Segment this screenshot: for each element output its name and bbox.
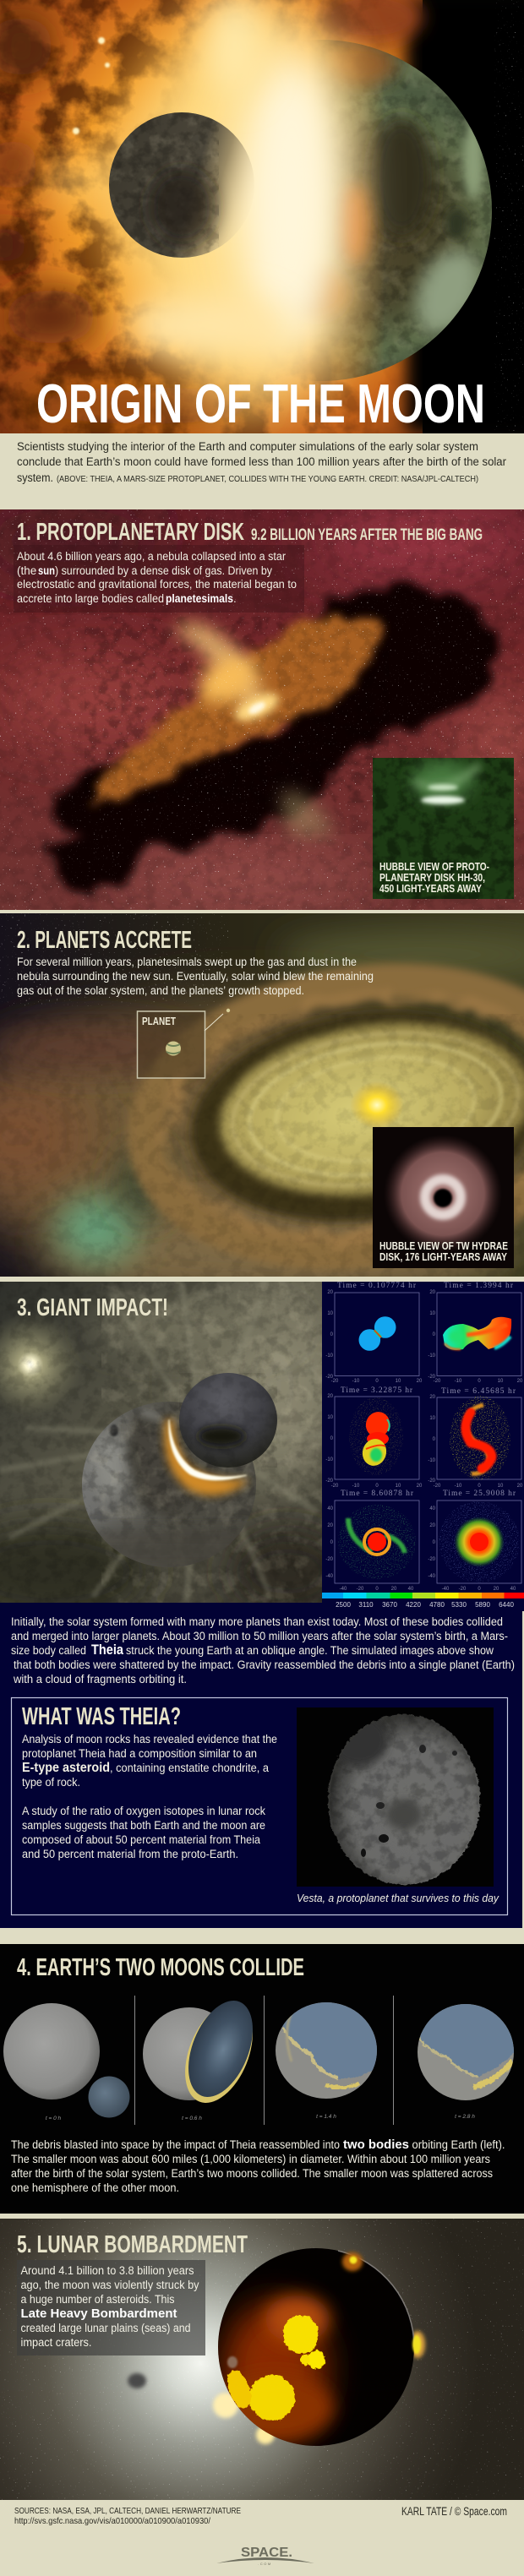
axis tick labels: 10	[498, 1484, 504, 1489]
text block: ) surrounded by a dense disk of gas. Driven by	[55, 564, 272, 577]
text block: one hemisphere of the other moon.	[11, 2181, 179, 2194]
axis tick labels: 20	[417, 1484, 423, 1489]
text block: planetesimals	[166, 592, 233, 605]
text block: A study of the ratio of oxygen isotopes in lunar rock	[22, 1805, 265, 1817]
axis tick labels: 10	[327, 1311, 334, 1316]
text block: E-type asteroid	[22, 1761, 110, 1775]
axis tick labels: -40	[442, 1587, 450, 1592]
axis tick labels: -40	[428, 1574, 436, 1579]
axis tick labels: -20	[428, 1557, 436, 1562]
axis tick labels: 20	[327, 1290, 334, 1295]
text block: Late Heavy Bombardment	[20, 2306, 177, 2321]
axis tick labels: -10	[325, 1353, 334, 1359]
axis tick labels: 10	[429, 1311, 436, 1316]
simulation titles: Time = 6.45685 hr	[441, 1387, 516, 1396]
planet: young Earth	[313, 40, 492, 381]
text block: Initially: Theia	[91, 1642, 124, 1658]
axis tick labels: 40	[408, 1587, 414, 1592]
text block: a huge number of asteroids. This	[20, 2293, 175, 2306]
footer: sources and credit	[14, 2505, 507, 2526]
axis tick labels: 40	[327, 1506, 334, 1511]
frame: t = 0.6 h: t = 0.6 h	[182, 2116, 202, 2121]
plot: t=0.11	[358, 1316, 396, 1351]
axis tick labels: 20	[327, 1523, 334, 1528]
frame: t = 0 h	[3, 2003, 130, 2121]
heading: 2. PLANETS ACCRETE	[17, 927, 192, 954]
text block: electrostatic and gravitational forces, the material began to	[17, 578, 297, 591]
simulation panel	[322, 1282, 524, 1609]
text block: nebula surrounding the new sun. Eventually, solar wind blew the remaining	[17, 970, 374, 983]
axis tick labels: -20	[428, 1375, 436, 1380]
logo: Space.com: .COM	[258, 2562, 272, 2566]
moon	[213, 2248, 425, 2446]
small body: Theia	[109, 112, 254, 258]
axis tick labels: 0	[433, 1540, 436, 1545]
asteroid	[128, 2373, 146, 2388]
axis tick labels: -40	[340, 1587, 347, 1592]
axis tick labels: 0	[478, 1379, 481, 1384]
color scale: 4220	[406, 1601, 421, 1609]
heading	[18, 522, 482, 541]
text block: two bodies	[343, 2138, 409, 2152]
axis tick labels: 10	[396, 1484, 401, 1489]
plot: t=1.4	[443, 1317, 511, 1350]
axis tick labels: -10	[325, 1457, 334, 1462]
inset: Hubble view of HH-30: PLANETARY DISK HH-30,	[379, 872, 485, 884]
axis tick labels: -20	[459, 1587, 467, 1592]
text block: type of rock.	[22, 1776, 80, 1789]
axis tick labels: 0	[330, 1540, 334, 1545]
text block: and 50 percent material from the proto-Earth.	[22, 1848, 238, 1860]
axis tick labels: -20	[434, 1484, 441, 1489]
text block: (the	[17, 564, 36, 577]
axis tick labels: -20	[434, 1379, 441, 1384]
callout: what was Theia	[12, 1698, 507, 1914]
axis tick labels: -20	[331, 1484, 339, 1489]
logo: Space.com	[216, 2546, 314, 2566]
axis tick labels: -20	[325, 1479, 334, 1484]
axis tick labels: 20	[429, 1395, 436, 1400]
inset: Hubble view of HH-30: 450 LIGHT-YEARS AWAY	[379, 883, 483, 895]
text block	[22, 1733, 277, 1860]
text block	[14, 545, 304, 613]
text block: Initially: with a cloud of fragments orbiting it.	[13, 1673, 187, 1686]
axis tick labels: 0	[375, 1587, 379, 1592]
spiral disk	[128, 954, 524, 1280]
heading: 3. GIANT IMPACT!	[17, 1294, 168, 1321]
axis tick labels: 20	[417, 1379, 423, 1384]
caption: Vesta, a protoplanet that survives to this day	[297, 1892, 499, 1904]
photo: Vesta	[297, 1707, 494, 1887]
axis tick labels: -10	[455, 1484, 462, 1489]
text block: Initially	[11, 1615, 515, 1686]
logo: Space.com: SPACE.	[241, 2546, 292, 2560]
panel: 4 two moons collide	[0, 1944, 524, 2214]
axis tick labels: -10	[352, 1484, 360, 1489]
panel: 5 lunar bombardment	[0, 2219, 524, 2500]
axis tick labels: -20	[325, 1375, 334, 1380]
axis tick labels: -20	[331, 1379, 339, 1384]
panel: 2 planets accrete	[0, 913, 524, 1293]
text block: .	[233, 592, 237, 605]
axis tick labels: 0	[433, 1437, 436, 1442]
frame: t = 0 h: t = 0 h	[46, 2116, 62, 2121]
color scale: 2500	[336, 1601, 351, 1609]
text block: , containing enstatite chondrite, a	[110, 1762, 269, 1774]
text block: ago, the moon was violently struck by	[20, 2279, 199, 2291]
axis tick labels: 0	[375, 1484, 379, 1489]
text block: protoplanet Theia had a composition similar to an	[22, 1747, 257, 1760]
frame: t = 2.8 h: t = 2.8 h	[455, 2114, 475, 2120]
axis tick labels: 20	[517, 1484, 523, 1489]
plot: t=8.6	[338, 1505, 416, 1579]
axis tick labels: 20	[429, 1290, 436, 1295]
intro text band	[0, 433, 524, 509]
text block: Initially: and merged into larger planets. About 30 million to 50 million years after the solar system’s birth, a Mars-	[11, 1630, 508, 1642]
simulation titles: Time = 0.107774 hr	[337, 1282, 417, 1290]
heading: 4. EARTH’S TWO MOONS COLLIDE	[17, 1954, 304, 1981]
footer: sources and credit: SOURCES: NASA, ESA, JPL, CALTECH, DANIEL HERWARTZ/NATURE	[14, 2506, 241, 2516]
intro text band: Scientists studying the interior of the Earth and computer simulations of the early solar system	[17, 440, 478, 453]
text block: created large lunar plains (seas) and	[20, 2322, 191, 2334]
text block: composed of about 50 percent material from Theia	[22, 1833, 260, 1846]
intro text band: system.	[17, 471, 53, 484]
inset: Hubble view of HH-30: HUBBLE VIEW OF PROTO-	[379, 861, 489, 873]
color scale: 5890	[475, 1601, 490, 1609]
text block: samples suggests that both Earth and the moon are	[22, 1819, 265, 1832]
panel: 1 protoplanetary disk	[0, 507, 524, 910]
heading: 5. LUNAR BOMBARDMENT	[17, 2231, 248, 2258]
axis tick labels: 10	[498, 1379, 504, 1384]
axis tick labels: 40	[510, 1587, 516, 1592]
impact illustration	[0, 1282, 347, 1622]
text block: after the birth of the solar system, Earth’s two moons collided. The smaller moon was splattered across	[11, 2167, 493, 2180]
small body: Theia	[179, 1373, 277, 1468]
heading: 1. PROTOPLANETARY DISK	[17, 519, 244, 546]
text block	[17, 2260, 205, 2355]
text block: The smaller moon was about 600 miles (1,000 kilometers) in diameter. Within about 100 million years	[11, 2153, 490, 2165]
text block: sun	[38, 564, 55, 577]
text block	[11, 2138, 505, 2194]
axis tick labels: 40	[429, 1506, 436, 1511]
axis tick labels: -40	[325, 1574, 334, 1579]
panel: 3 giant impact	[0, 1282, 524, 1928]
frame: t = 0.6 h	[143, 1991, 266, 2121]
axis tick labels: -20	[428, 1479, 436, 1484]
axis tick labels: 10	[429, 1416, 436, 1421]
text block: accrete into large bodies called	[17, 592, 164, 605]
color scale	[322, 1593, 524, 1609]
simulation titles: Time = 3.22875 hr	[341, 1386, 413, 1395]
text block: impact craters.	[20, 2336, 91, 2349]
simulation titles: Time = 8.60878 hr	[341, 1490, 414, 1498]
axis tick labels: 0	[375, 1379, 379, 1384]
axis tick labels: 0	[330, 1332, 334, 1337]
text block: About 4.6 billion years ago, a nebula collapsed into a star	[17, 550, 286, 563]
text block	[17, 956, 374, 997]
color scale: 3670	[382, 1601, 397, 1609]
plot: t=6.5	[450, 1396, 510, 1480]
axis tick labels: 0	[330, 1436, 334, 1441]
axis tick labels: 0	[478, 1587, 481, 1592]
axis tick labels: 10	[327, 1415, 334, 1420]
axis tick labels: -10	[428, 1353, 436, 1359]
callout: planet close-up	[137, 1009, 230, 1078]
inset: Hubble view of TW Hydrae	[373, 1127, 514, 1268]
plot: t=25.9	[439, 1501, 520, 1582]
axis tick labels: 20	[494, 1587, 499, 1592]
axis tick labels: 20	[517, 1379, 523, 1384]
simulation titles: Time = 25.9008 hr	[443, 1490, 516, 1498]
text block: For several million years, planetesimals swept up the gas and dust in the	[17, 956, 357, 968]
impact glows	[223, 2315, 325, 2421]
orange cloud and star	[85, 615, 390, 803]
frame: t = 1.4 h: t = 1.4 h	[316, 2114, 336, 2120]
color scale: 4780	[429, 1601, 445, 1609]
text block: Initially: Initially, the solar system formed with many more planets than exist today. Most of these bodies collided	[11, 1615, 503, 1628]
hero image: Theia collides with young Earth	[0, 0, 524, 434]
callout: planet close-up: PLANET	[142, 1016, 176, 1027]
axis tick labels: 10	[396, 1379, 401, 1384]
frame: t = 1.4 h	[276, 1994, 380, 2120]
axis tick labels: 0	[433, 1332, 436, 1337]
lava cracks	[287, 183, 368, 317]
color scale: 5330	[451, 1601, 467, 1609]
dark dust cloud	[46, 585, 499, 897]
lit crescent	[169, 1419, 247, 1480]
simulation titles: Time = 1.3994 hr	[444, 1282, 514, 1290]
inset: Hubble view of HH-30	[373, 758, 514, 899]
text block: Around 4.1 billion to 3.8 billion years	[20, 2264, 194, 2277]
frame: t = 2.8 h	[414, 1998, 517, 2120]
axis tick labels: -10	[428, 1458, 436, 1463]
intro text band: conclude that Earth’s moon could have formed less than 100 million years after the birth of the solar	[17, 455, 506, 468]
axis tick labels: 0	[478, 1484, 481, 1489]
text block: gas out of the solar system, and the planets’ growth stopped.	[17, 984, 304, 997]
axis tick labels: -20	[325, 1557, 334, 1562]
text block: The debris blasted into space by the impact of Theia reassembled into	[11, 2138, 340, 2151]
green glow	[57, 1195, 138, 1263]
axis tick labels: 20	[429, 1523, 436, 1528]
text block: orbiting Earth (left).	[412, 2138, 505, 2151]
axis tick labels	[325, 1290, 523, 1592]
large body: proto-Earth	[82, 1402, 256, 1571]
color scale: 6440	[499, 1601, 514, 1609]
text block: Analysis of moon rocks has revealed evidence that the	[22, 1733, 277, 1745]
simulation titles	[337, 1282, 516, 1498]
footer: sources and credit: http://svs.gsfc.nasa.gov/vis/a010000/a010900/a010930/	[14, 2516, 210, 2526]
plot: t=3.2	[349, 1397, 403, 1475]
orange glow	[165, 1419, 249, 1495]
heading: WHAT WAS THEIA?	[22, 1703, 181, 1730]
text block: Initially: size body called	[11, 1644, 86, 1657]
axis tick labels: -10	[352, 1379, 360, 1384]
axis tick labels: 20	[327, 1394, 334, 1399]
axis tick labels: -20	[357, 1587, 364, 1592]
axis tick labels: 20	[391, 1587, 397, 1592]
axis tick labels: -10	[455, 1379, 462, 1384]
color scale: 3110	[358, 1601, 374, 1609]
text block: Initially: struck the young Earth at an oblique angle. The simulated images above show	[126, 1644, 494, 1657]
